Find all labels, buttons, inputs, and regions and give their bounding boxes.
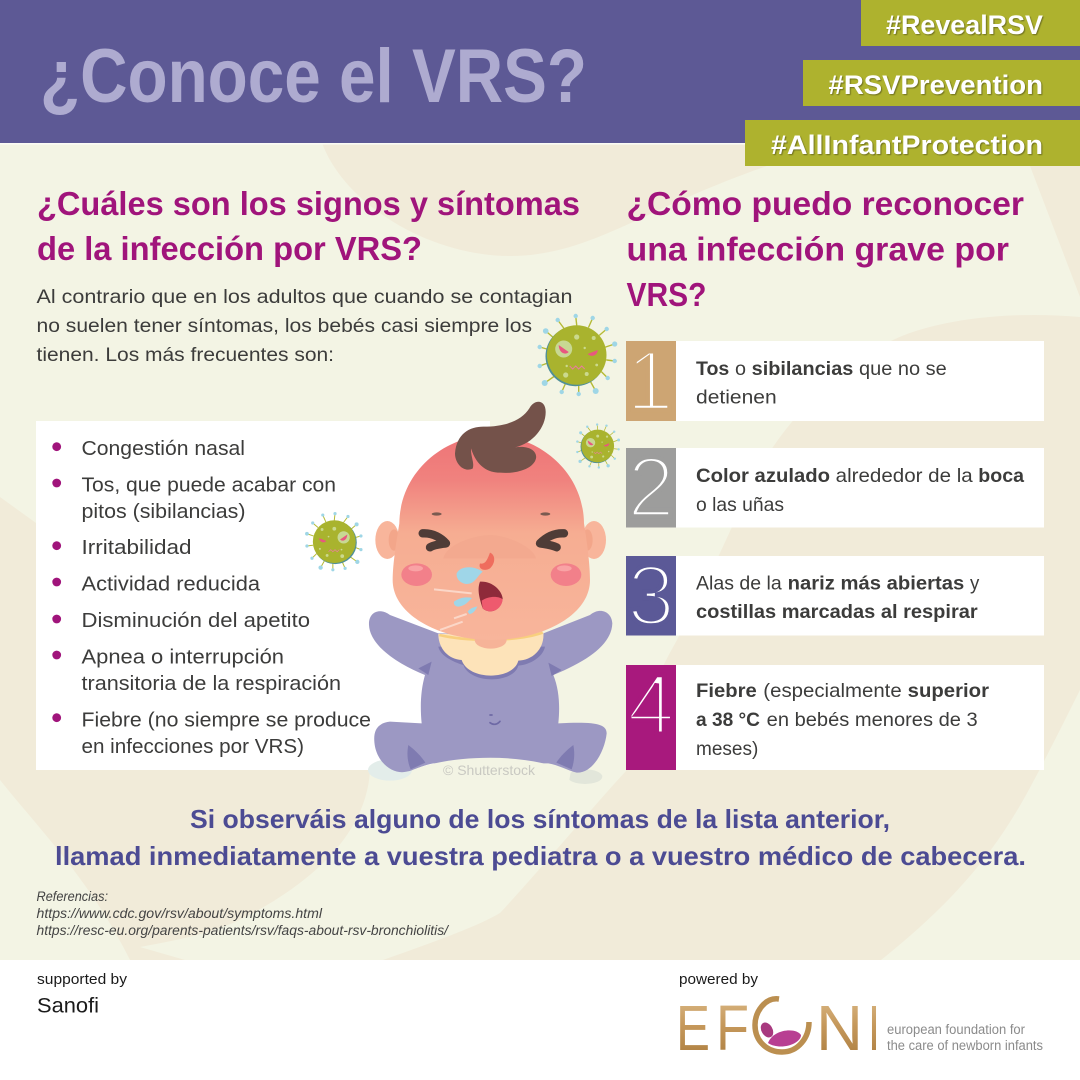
list text: Fiebre (no siempre se produce (82, 710, 371, 732)
hashtag: RevealRSV: #RevealRSV (886, 10, 1043, 40)
heading: recognise severe infection: una infección grave por (626, 232, 1009, 268)
copyright note: © Shutterstock (443, 762, 536, 778)
sign 1 text: que no se (859, 358, 947, 380)
sign 4 text: superior (908, 680, 989, 702)
sign 1 text: detienen (696, 386, 777, 408)
references: https://resc-eu.org/parents-patients/rsv/faqs-about-rsv-bronchiolitis/ (36, 923, 449, 938)
supporter: Sanofi (37, 994, 99, 1018)
number 2: 2 (627, 440, 675, 536)
illustration: sick baby (368, 402, 612, 793)
heading: signs and symptoms: de la infección por VRS? (37, 231, 422, 268)
head (393, 435, 590, 640)
header band (0, 0, 1080, 143)
sign 3 text (696, 572, 980, 623)
cheeks (401, 563, 581, 586)
EFCNI logo (676, 992, 1043, 1064)
ears (375, 521, 606, 559)
sign 3 (626, 548, 1044, 644)
EFCNI logo: F (716, 992, 749, 1064)
list text: transitoria de la respiración (82, 673, 341, 695)
sign 2 text: o las uñas (696, 494, 784, 516)
EFCNI logo: N (816, 992, 863, 1064)
EFCNI logo: E (676, 992, 710, 1064)
bib (438, 632, 543, 676)
sign 4 (626, 658, 1044, 770)
list text: Disminución del apetito (82, 610, 310, 632)
list text: pitos (sibilancias) (82, 501, 246, 523)
sign 1 text: Tos (696, 358, 729, 380)
intro paragraph: Al contrario que en los adultos que cuando se contagian (36, 287, 572, 308)
references: https://www.cdc.gov/rsv/about/symptoms.html (36, 906, 323, 921)
footer band (0, 960, 1080, 1080)
sign 4 text: (especialmente (763, 680, 902, 702)
panel: symptom list (36, 421, 490, 770)
list text: Tos, que puede acabar con (82, 474, 336, 496)
sign 3 text: Alas de la (696, 572, 782, 594)
sign 2 text: boca (978, 465, 1024, 487)
sign 2 text: Color azulado (696, 465, 830, 487)
hair (455, 402, 546, 473)
call to action: Si observáis alguno de los síntomas de la lista anterior, (190, 804, 890, 834)
references: Referencias: (36, 889, 108, 904)
icon: logo ring with baby (755, 999, 809, 1052)
icon: large virus (538, 314, 617, 396)
sign 1 text: o (735, 358, 746, 380)
title: ¿Conoce el VRS? (40, 34, 587, 119)
background swooshes (0, 143, 1080, 960)
sign 2 text: alrededor de la (836, 465, 973, 487)
sign 3 text: nariz más abiertas (788, 572, 964, 594)
blanket fold (413, 758, 571, 793)
mouth (479, 582, 503, 611)
sign 1 text: sibilancias (752, 358, 853, 380)
list text: en infecciones por VRS) (82, 736, 304, 758)
hashtag: AllInfantProtection (745, 120, 1080, 166)
sign 4 text: Fiebre (696, 680, 757, 702)
heading: recognise severe infection: VRS? (626, 277, 706, 314)
belly button (490, 715, 500, 724)
intro paragraph: no suelen tener síntomas, los bebés casi siempre los (36, 316, 532, 337)
heading: recognise severe infection: ¿Cómo puedo reconocer (626, 186, 1024, 223)
list text: Irritabilidad (82, 537, 192, 559)
EFCNI logo: the care of newborn infants (887, 1038, 1043, 1053)
EFCNI logo: I (868, 992, 880, 1064)
sign 1 text (696, 358, 947, 408)
nose shadow (443, 535, 536, 558)
references (36, 889, 449, 938)
number 1: 1 (626, 334, 674, 429)
heading: signs and symptoms: ¿Cuáles son los signos y síntomas (37, 186, 580, 223)
hashtag: RevealRSV (861, 0, 1080, 46)
bib collar (439, 633, 543, 640)
icon: left virus (305, 512, 363, 571)
number 4: 4 (627, 658, 675, 753)
sign 4 text: en bebés menores de 3 (767, 709, 978, 731)
eyebrows (432, 512, 550, 516)
body and limbs (369, 611, 612, 773)
intro paragraph (36, 287, 572, 366)
heading: recognise severe infection (626, 186, 1024, 314)
floor shadow (368, 759, 602, 784)
number 3: 3 (627, 548, 675, 644)
list text: Apnea o interrupción (82, 646, 284, 668)
list text (82, 438, 371, 758)
sign 4 text (696, 680, 989, 760)
bullets (52, 442, 61, 722)
sign 2 text (696, 465, 1024, 516)
icon: small virus (576, 423, 620, 469)
supporter: supported by (37, 971, 128, 988)
sign 2 (626, 440, 1044, 536)
list text: Actividad reducida (82, 574, 261, 596)
call to action (55, 804, 1026, 871)
hashtag: RSVPrevention: #RSVPrevention (828, 70, 1043, 100)
sign 4 text: meses) (696, 738, 758, 760)
sign 4 text: a 38 °C (696, 709, 760, 731)
list text: Congestión nasal (82, 438, 245, 460)
hashtag: AllInfantProtection: #AllInfantProtection (771, 130, 1043, 160)
EFCNI logo: european foundation for (887, 1022, 1025, 1037)
sneeze spray (434, 589, 477, 630)
hashtag: RSVPrevention (803, 60, 1080, 106)
sign 3 text: y (970, 572, 980, 594)
header underline (0, 143, 745, 145)
runny nose (457, 553, 494, 584)
sign 1 (626, 334, 1044, 429)
supporter (37, 971, 128, 1018)
chin (475, 631, 507, 649)
intro paragraph: tienen. Los más frecuentes son: (36, 345, 334, 366)
squeezed eyes (423, 533, 564, 547)
heading: signs and symptoms (37, 186, 580, 268)
powered by label: powered by (679, 971, 758, 988)
call to action: llamad inmediatamente a vuestra pediatra o a vuestro médico de cabecera. (55, 841, 1026, 871)
sign 3 text: costillas marcadas al respirar (696, 601, 978, 623)
body shading (407, 647, 574, 769)
